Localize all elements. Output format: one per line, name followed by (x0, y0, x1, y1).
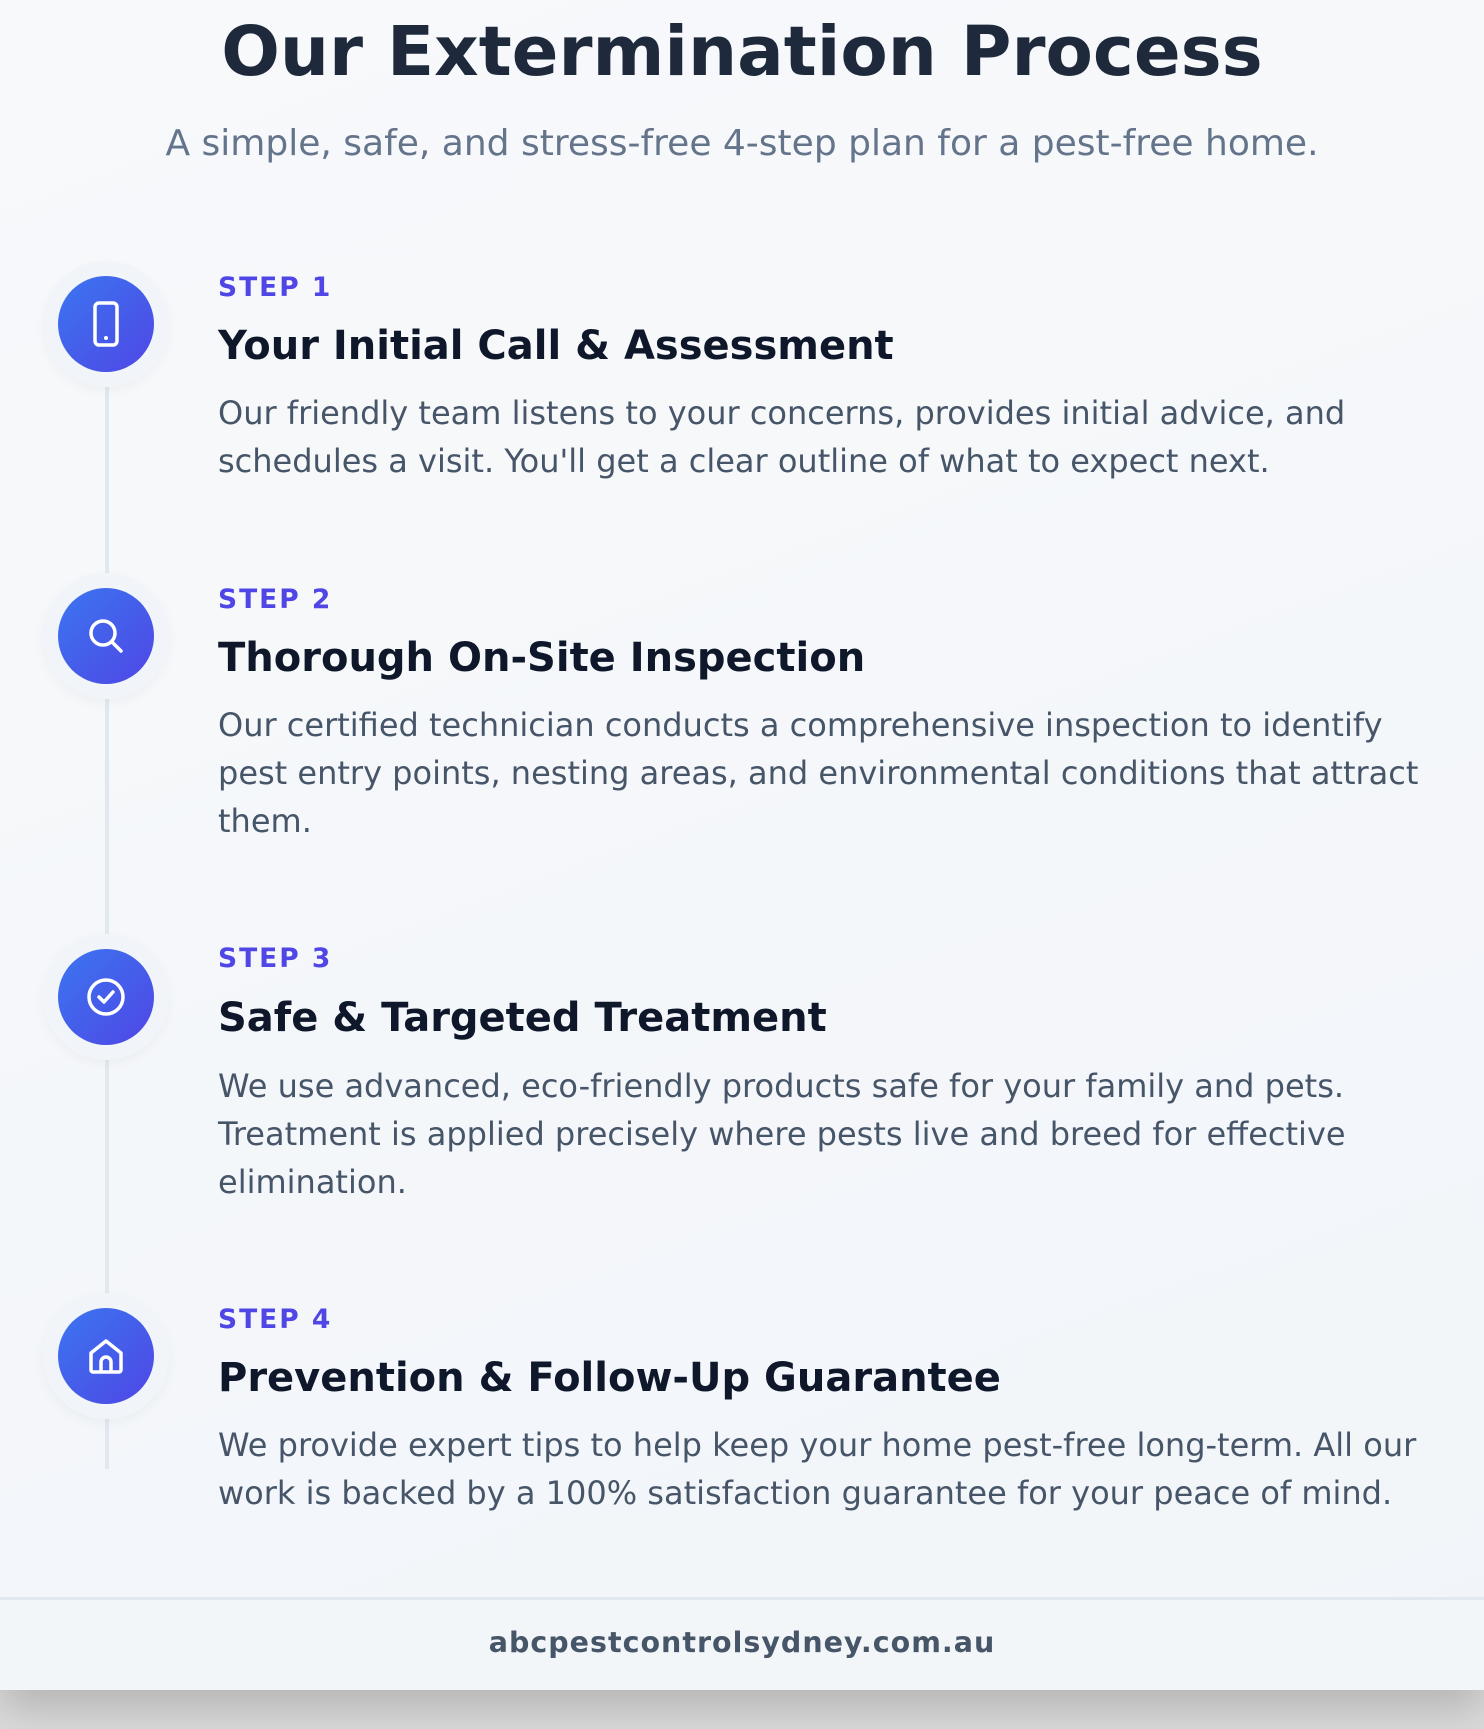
icon: check (43, 934, 169, 1060)
heading: Your Initial Call & Assessment (218, 323, 894, 369)
title: Our Extermination Process (221, 12, 1263, 92)
footer: abcpestcontrolsydney.com.au (489, 1626, 995, 1659)
timeline line (105, 380, 109, 1469)
heading: Safe & Targeted Treatment (218, 995, 827, 1041)
icon: home (43, 1293, 169, 1419)
subtitle: A simple, safe, and stress-free 4-step plan for a pest-free home. (165, 123, 1319, 164)
heading: Prevention & Follow-Up Guarantee (218, 1355, 1001, 1401)
step label: STEP 4 (218, 1304, 332, 1335)
body text: We use advanced, eco-friendly products safe for your family and pets. Treatment is applied precisely where pests live and breed for effective elimination. (218, 1067, 1346, 1201)
body text: Our certified technician conducts a comprehensive inspection to identify pest entry points, nesting areas, and environmental conditions that attract them. (218, 706, 1418, 840)
icon: search (43, 573, 169, 699)
step label: STEP 2 (218, 584, 332, 615)
step 4 (58, 1293, 1416, 1512)
body text: We provide expert tips to help keep your home pest-free long-term. All our work is backed by a 100% satisfaction guarantee for your peace of mind. (218, 1426, 1416, 1512)
step 1 (58, 272, 1345, 480)
step 3 (58, 934, 1346, 1201)
step 2 (58, 573, 1418, 840)
step label: STEP 3 (218, 943, 332, 974)
footer (0, 1597, 1484, 1690)
icon: phone (43, 261, 169, 387)
step label: STEP 1 (218, 272, 332, 303)
body text: Our friendly team listens to your concerns, provides initial advice, and schedules a visit. You'll get a clear outline of what to expect next. (218, 394, 1345, 480)
heading: Thorough On-Site Inspection (218, 635, 865, 681)
